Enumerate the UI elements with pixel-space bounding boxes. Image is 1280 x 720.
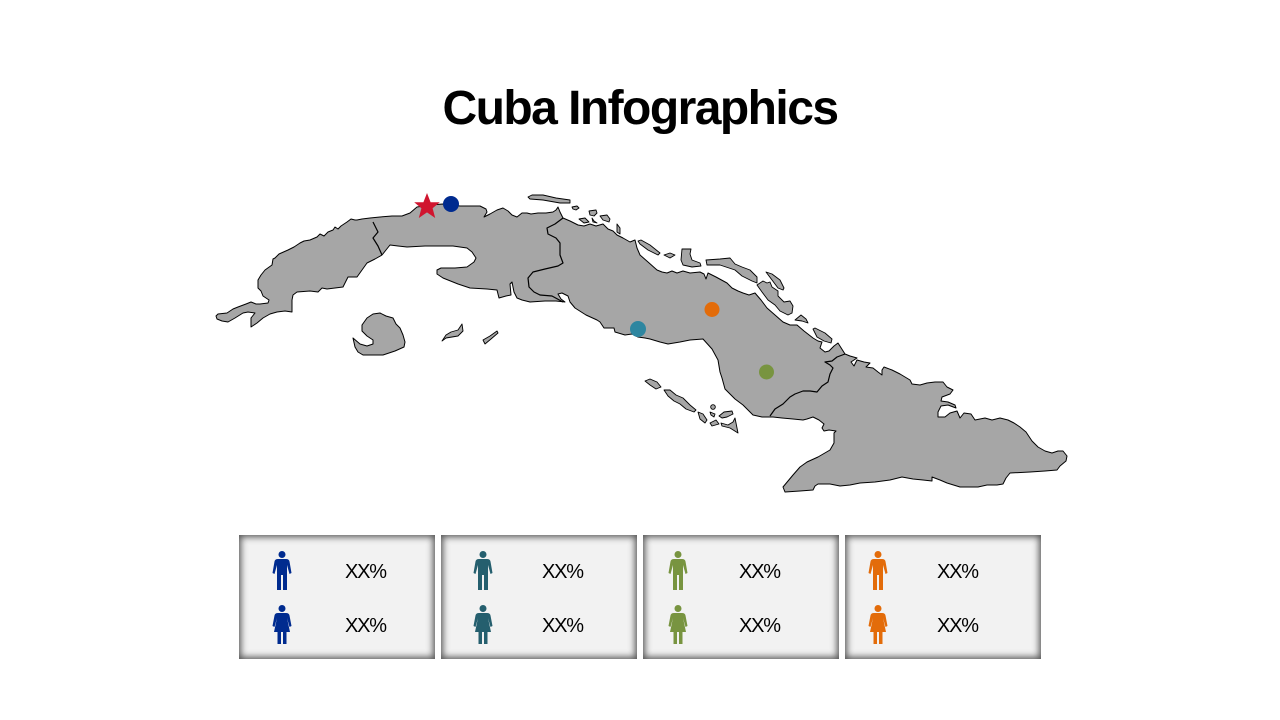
marker: capital star bbox=[414, 193, 440, 218]
province borders bbox=[373, 218, 845, 416]
text: value: XX% bbox=[345, 561, 386, 583]
panel: green bbox=[643, 535, 839, 659]
panel: orange bbox=[845, 535, 1041, 659]
icon: woman teal bbox=[474, 605, 492, 644]
panel: blue bbox=[239, 535, 435, 659]
icon: woman green bbox=[668, 605, 688, 644]
icon: man blue bbox=[272, 551, 292, 590]
text: value: XX% bbox=[542, 561, 583, 583]
icon: woman blue bbox=[272, 605, 292, 644]
marker: blue bbox=[443, 196, 459, 212]
marker: orange bbox=[704, 302, 720, 317]
title: Cuba Infographics bbox=[442, 82, 838, 135]
northern cays bbox=[528, 195, 832, 343]
island: Isla de la Juventud bbox=[353, 313, 405, 355]
marker: teal bbox=[630, 321, 646, 337]
map of Cuba bbox=[216, 193, 1068, 492]
southern cays bbox=[442, 324, 738, 433]
text: value: XX% bbox=[937, 561, 978, 583]
marker: green bbox=[759, 364, 774, 380]
text: value: XX% bbox=[542, 615, 583, 637]
icon: woman orange bbox=[868, 605, 888, 644]
icon: man orange bbox=[868, 551, 888, 590]
text: value: XX% bbox=[937, 615, 978, 637]
text: value: XX% bbox=[345, 615, 386, 637]
icon: man green bbox=[668, 551, 688, 590]
text: value: XX% bbox=[739, 615, 780, 637]
mainland bbox=[216, 204, 1067, 492]
panel: teal bbox=[441, 535, 637, 659]
icon: man teal bbox=[474, 551, 492, 590]
text: value: XX% bbox=[739, 561, 780, 583]
